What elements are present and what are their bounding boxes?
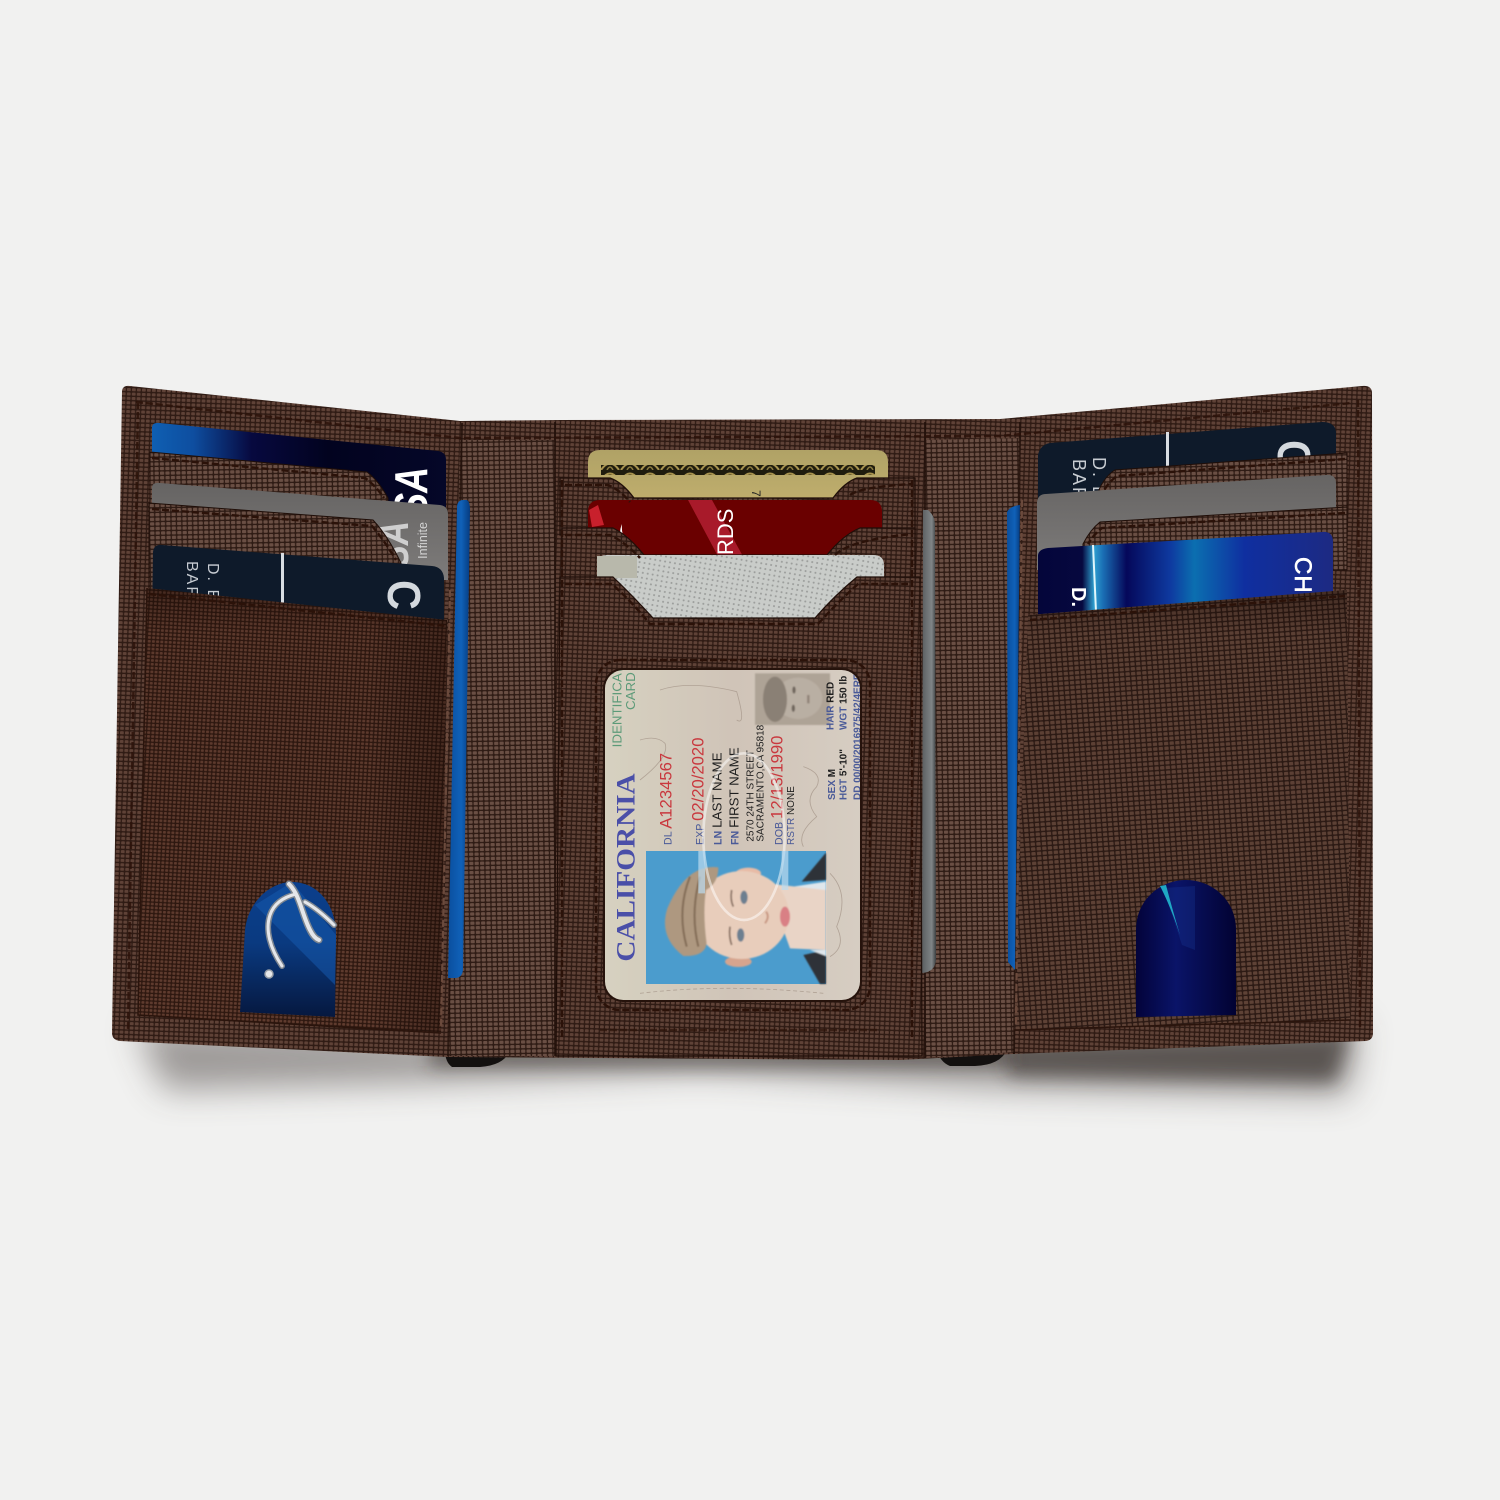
card: dark carbon card: D. B (204, 563, 221, 602)
pocket: right slot 1 (1095, 453, 1347, 530)
license data fields: SEX M (827, 769, 838, 800)
license data fields: HGT 5'-10" (839, 749, 850, 800)
heading: California: CALIFORNIA (611, 773, 640, 962)
license data fields: EXP 02/20/2020 (688, 738, 707, 845)
card: pale security card (597, 555, 884, 630)
hologram seal overlay (702, 753, 785, 920)
card: navy Visa: VISA (386, 467, 437, 551)
id window stitching (596, 660, 870, 1010)
wallet body (112, 386, 1373, 1060)
card: dark carbon card (1038, 422, 1336, 530)
card: California driver license in window (603, 642, 864, 1002)
card: gray Visa Infinite: VISA (370, 521, 418, 599)
panel: left card slots (138, 423, 450, 1033)
blue card sliver right of fold (1007, 505, 1020, 970)
license data fields: DL A1234567 (657, 753, 676, 845)
card: blue chase card: CH (1289, 557, 1316, 594)
slot: left thumb notch with logo card (240, 882, 336, 1017)
card: navy Visa (152, 423, 446, 551)
icon: silver antler logo (265, 884, 334, 978)
pocket: left slot 1 (150, 452, 388, 525)
license data fields: DOB 12/13/1990 (768, 736, 787, 845)
card: blue chase card: D. (1067, 587, 1089, 607)
license background (605, 670, 860, 1000)
card: dark carbon card: BAR (1069, 459, 1089, 502)
pocket: right slot 2 (1083, 507, 1347, 570)
card: red rewards card: RDS (713, 509, 738, 555)
license data fields: SACRAMENTO,CA 95818 (755, 724, 766, 842)
pocket: left slot 2 (149, 503, 401, 600)
card: blue chase card (1038, 532, 1333, 620)
license data fields: 2570 24TH STREET (745, 750, 756, 842)
license data fields: HAIR RED (825, 682, 836, 730)
card: red rewards card (588, 500, 882, 560)
pocket: center front pocket (556, 577, 922, 1056)
photo: portrait on blue (646, 851, 826, 984)
elastic tabs peeking beneath wallet (445, 1050, 1007, 1067)
pocket: left front pocket (138, 588, 450, 1033)
pocket: center slot 1 (560, 478, 915, 535)
license guilloche lines (640, 685, 842, 993)
center fold bands (447, 422, 1020, 1058)
gray card sliver right of center (922, 510, 936, 973)
identification card label: IDENTIFICATION (610, 642, 625, 747)
card: dark carbon card: BAR (183, 561, 200, 600)
card label line 2: CARD (623, 672, 638, 710)
card: dark carbon card (152, 545, 444, 625)
panel: right card slots (1014, 422, 1350, 1030)
blue card sliver left of fold (448, 500, 470, 978)
pocket: right front pocket (1014, 500, 1350, 1030)
illustration: open trifold wallet (112, 386, 1377, 1116)
card: dark carbon card: D. B (1089, 457, 1109, 500)
card: dark carbon card: C (377, 580, 429, 610)
license data fields (657, 667, 864, 845)
license data fields: DD 00/00/2016975/42/4ERFA (853, 667, 864, 800)
pocket stitching (562, 480, 912, 1040)
card: dark carbon card: C (1267, 440, 1319, 470)
card: gold card (588, 450, 888, 510)
ghost portrait (755, 673, 830, 725)
panel: center card slots (556, 450, 922, 1056)
card: gray card (1037, 475, 1336, 570)
card: gold card: 7 (749, 490, 763, 497)
card: gray Visa Infinite: Infinite (416, 522, 430, 559)
license data fields: LN LAST NAME (710, 752, 725, 845)
slot: right thumb notch (1136, 880, 1236, 1017)
license data fields: WGT 150 lb (839, 676, 850, 730)
pocket: center slot 2 (562, 528, 915, 585)
edge stitching around wallet (128, 400, 1360, 1030)
license data fields: RSTR NONE (786, 786, 797, 845)
drop shadow under wallet (135, 1025, 1360, 1095)
card: gray Visa Infinite (152, 483, 448, 599)
license data fields: FN FIRST NAME (726, 747, 741, 845)
